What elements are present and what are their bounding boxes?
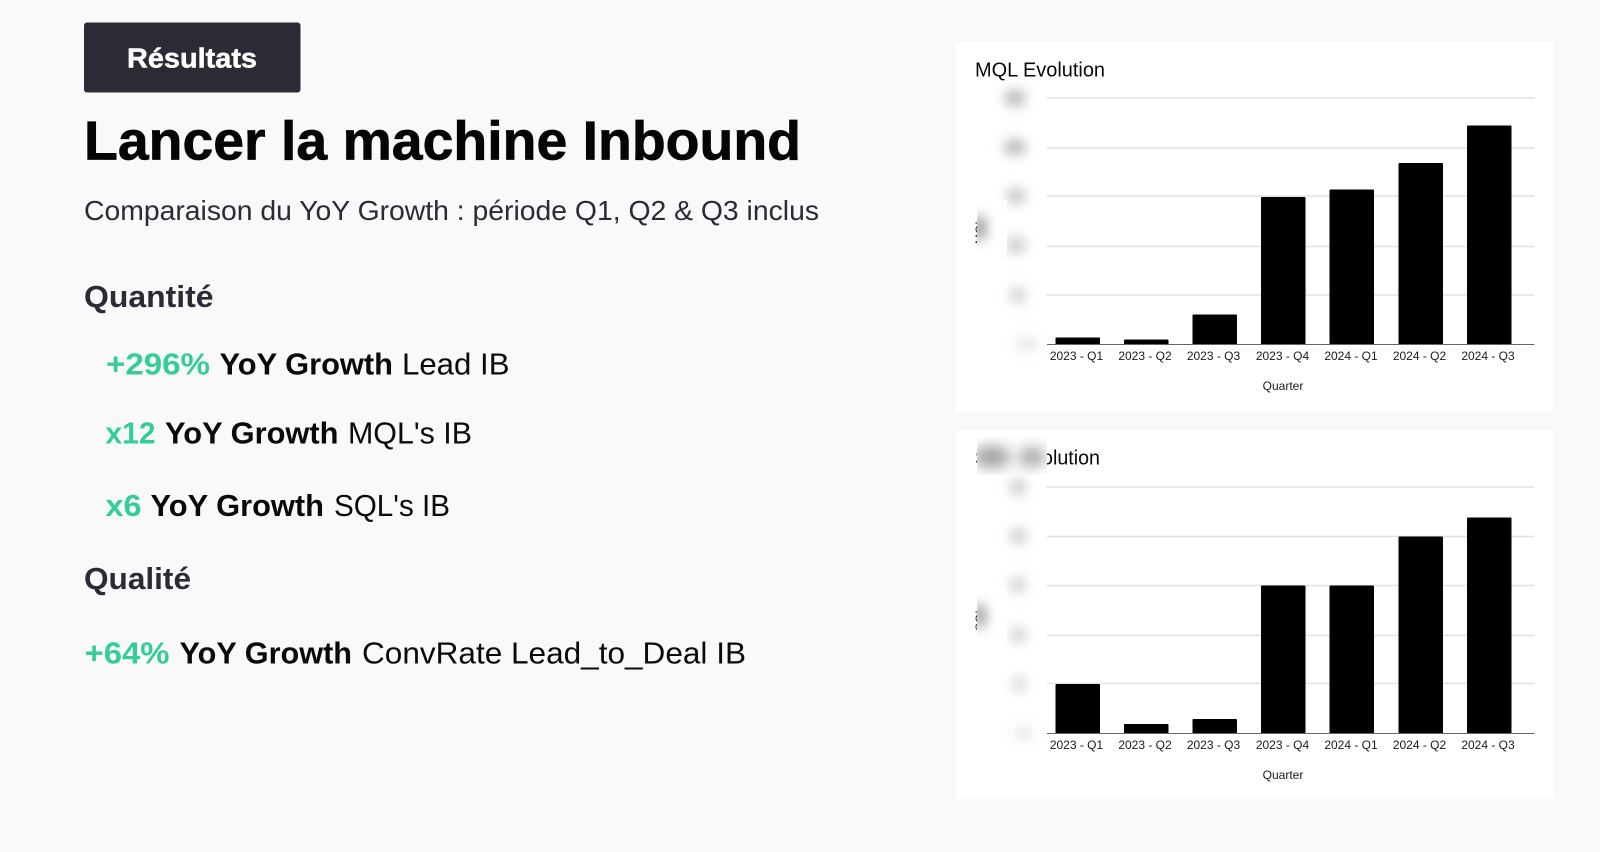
x-axis labels: 2024 - Q3 [1461,349,1515,363]
metric: SQL growth: YoY Growth [150,489,324,523]
metric: Lead IB growth: YoY Growth [220,348,393,382]
x-axis title: Quarter [1263,379,1303,393]
metric: conversion rate growth: YoY Growth [180,636,352,670]
metric: Lead IB growth: Lead IB [402,348,510,382]
x axis line [1047,732,1534,734]
panel: MQL Evolution chart [976,62,1534,392]
metric: SQL growth: x6 [106,489,142,523]
blurred y-axis values [1004,90,1037,351]
x-axis labels: 2023 - Q2 [1118,349,1172,363]
blurred y-axis values [1010,479,1034,740]
subtitle: Comparaison du YoY Growth : période Q1, Q2 & Q3 inclus [84,195,819,226]
x-axis title: Quarter [1263,768,1303,782]
metric: Lead IB growth: +296% [106,348,210,382]
x-axis labels [1050,349,1515,363]
metric: MQL growth: YoY Growth [165,416,338,450]
metric: Lead IB growth [106,348,510,382]
metric: conversion rate growth: +64% [84,636,170,670]
badge: Résultats: Résultats [127,42,257,74]
heading: Quantité: Quantité [84,280,214,314]
heading: Qualité: Qualité [84,562,191,596]
x-axis labels: 2023 - Q4 [1256,738,1310,752]
x-axis labels: 2023 - Q2 [1118,738,1172,752]
metric: MQL growth: MQL's IB [348,416,472,450]
y-axis title, blurred: SQLs [973,601,987,631]
badge: Résultats [84,22,300,92]
y-axis title, blurred [976,598,1007,638]
chart title: SQL Evolution, partly blurred: SQL Evolution [975,448,1100,470]
bars [1056,126,1512,344]
metric: SQL growth [106,489,450,523]
metric: MQL growth [106,416,472,450]
bars [1056,518,1512,734]
x-axis labels: 2024 - Q1 [1324,349,1378,363]
x-axis labels: 2024 - Q1 [1324,738,1378,752]
x-axis labels: 2024 - Q3 [1461,738,1515,752]
x-axis labels: 2024 - Q2 [1393,349,1447,363]
x-axis labels: 2023 - Q3 [1187,738,1241,752]
metric: conversion rate growth [84,636,746,670]
chart title: SQL Evolution, partly blurred [973,437,1100,475]
x-axis labels [1050,738,1515,752]
x-axis labels: 2024 - Q2 [1393,738,1447,752]
title: Lancer la machine Inbound [84,110,801,172]
metric: MQL growth: x12 [106,416,156,450]
y-axis title, blurred: MQLs [973,212,987,244]
y-axis title, blurred [973,200,1007,256]
x axis line [1047,344,1534,346]
x-axis labels: 2023 - Q4 [1256,349,1310,363]
gridlines [1047,98,1534,295]
x-axis labels: 2023 - Q1 [1050,349,1104,363]
gridlines [1047,487,1534,684]
metric: conversion rate growth: ConvRate Lead_to_Deal IB [362,636,746,670]
x-axis labels: 2023 - Q3 [1187,349,1241,363]
panel: SQL Evolution chart [976,440,1534,782]
x-axis labels: 2023 - Q1 [1050,738,1104,752]
chart title: MQL Evolution: MQL Evolution [975,60,1105,82]
metric: SQL growth: SQL's IB [334,489,450,523]
